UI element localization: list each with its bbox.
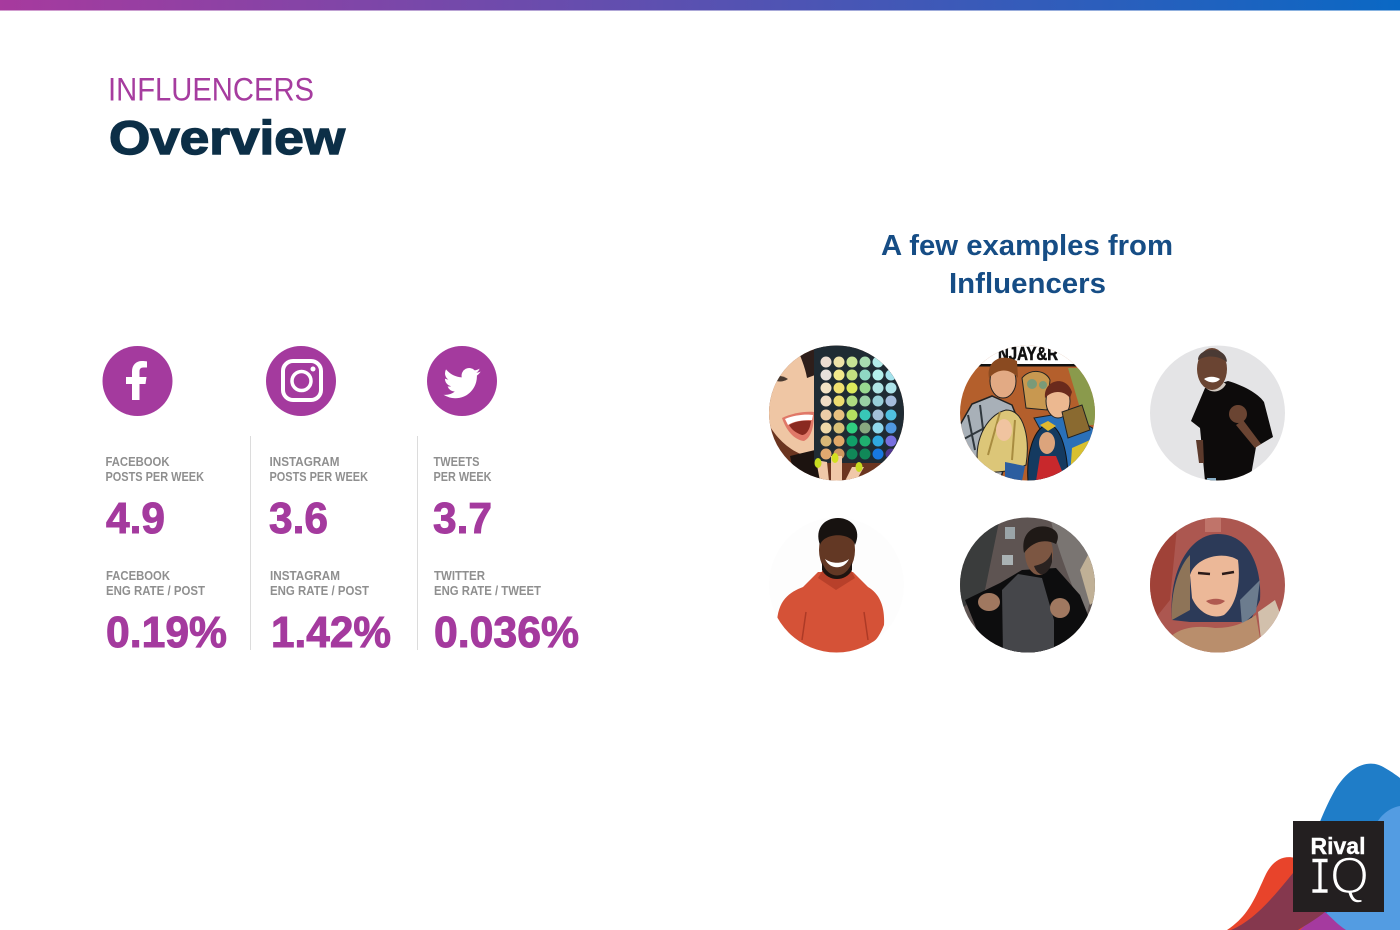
- icon: facebook: [102, 346, 172, 416]
- label: facebook posts per week: POSTS PER WEEK: [106, 470, 204, 484]
- label: facebook engagement rate: FACEBOOK: [106, 569, 170, 583]
- section label: INFLUENCERS: [108, 72, 314, 108]
- label: instagram posts per week: POSTS PER WEEK: [270, 470, 368, 484]
- label: instagram engagement rate: INSTAGRAM: [270, 569, 340, 583]
- value: twitter engagement rate: 0.036%: [434, 609, 579, 657]
- examples heading: [881, 230, 1173, 300]
- panel: instagram stats: [266, 346, 391, 657]
- decorative light blue wave: [1310, 806, 1400, 930]
- examples heading: Influencers: [949, 268, 1106, 300]
- label: facebook posts per week: FACEBOOK: [106, 455, 170, 469]
- logo word: IQ: I: [1308, 850, 1332, 909]
- label: instagram engagement rate: [270, 569, 369, 598]
- comic hero face: [990, 370, 1016, 398]
- avatar: man in black t-shirt: [1150, 345, 1286, 481]
- title block: [108, 72, 346, 165]
- heading: Overview: [109, 112, 346, 165]
- avatar: comic book illustration: NJAY&R: [998, 344, 1058, 364]
- label: facebook engagement rate: [106, 569, 205, 598]
- logo word: Rival: Rival: [1310, 833, 1366, 859]
- panel: twitter stats: [427, 346, 579, 657]
- label: facebook engagement rate: ENG RATE / POST: [106, 584, 205, 598]
- label: instagram posts per week: INSTAGRAM: [270, 455, 340, 469]
- examples heading: A few examples from: [881, 230, 1173, 262]
- decorative blue wave: [1280, 764, 1400, 930]
- label: tweets per week: TWEETS: [434, 455, 480, 469]
- avatar: comic book illustration: [960, 344, 1096, 481]
- label: tweets per week: [434, 455, 492, 484]
- value: instagram engagement rate: 1.42%: [271, 609, 391, 657]
- Rival IQ logo: [1227, 764, 1400, 930]
- top gradient bar: [0, 0, 1400, 10]
- label: facebook posts per week: [106, 455, 204, 484]
- label: twitter engagement rate: TWITTER: [434, 569, 485, 583]
- value: instagram posts per week: 3.6: [269, 495, 328, 543]
- avatar: man in red hoodie: [777, 518, 884, 652]
- label: tweets per week: PER WEEK: [434, 470, 492, 484]
- decorative purple wave: [1295, 912, 1346, 930]
- value: facebook posts per week: 4.9: [106, 495, 165, 543]
- value: tweets per week: 3.7: [433, 495, 492, 543]
- avatar: makeup palette: [769, 345, 909, 481]
- logo word: IQ: Q: [1330, 847, 1369, 905]
- avatar: woman in tan sweater: [1150, 517, 1290, 655]
- label: instagram posts per week: [270, 455, 368, 484]
- decorative maroon overlap: [1231, 873, 1325, 930]
- value: facebook engagement rate: 0.19%: [106, 609, 227, 657]
- label: instagram engagement rate: ENG RATE / POST: [270, 584, 369, 598]
- avatar: man in black jacket: [960, 517, 1096, 655]
- panel: facebook stats: [102, 346, 227, 657]
- icon: instagram: [266, 346, 336, 416]
- label: twitter engagement rate: [434, 569, 541, 598]
- logo square: [1293, 821, 1384, 912]
- decorative red wave: [1227, 857, 1320, 930]
- logo word: IQ: [1308, 847, 1369, 909]
- icon: twitter: [427, 346, 497, 416]
- label: twitter engagement rate: ENG RATE / TWEET: [434, 584, 541, 598]
